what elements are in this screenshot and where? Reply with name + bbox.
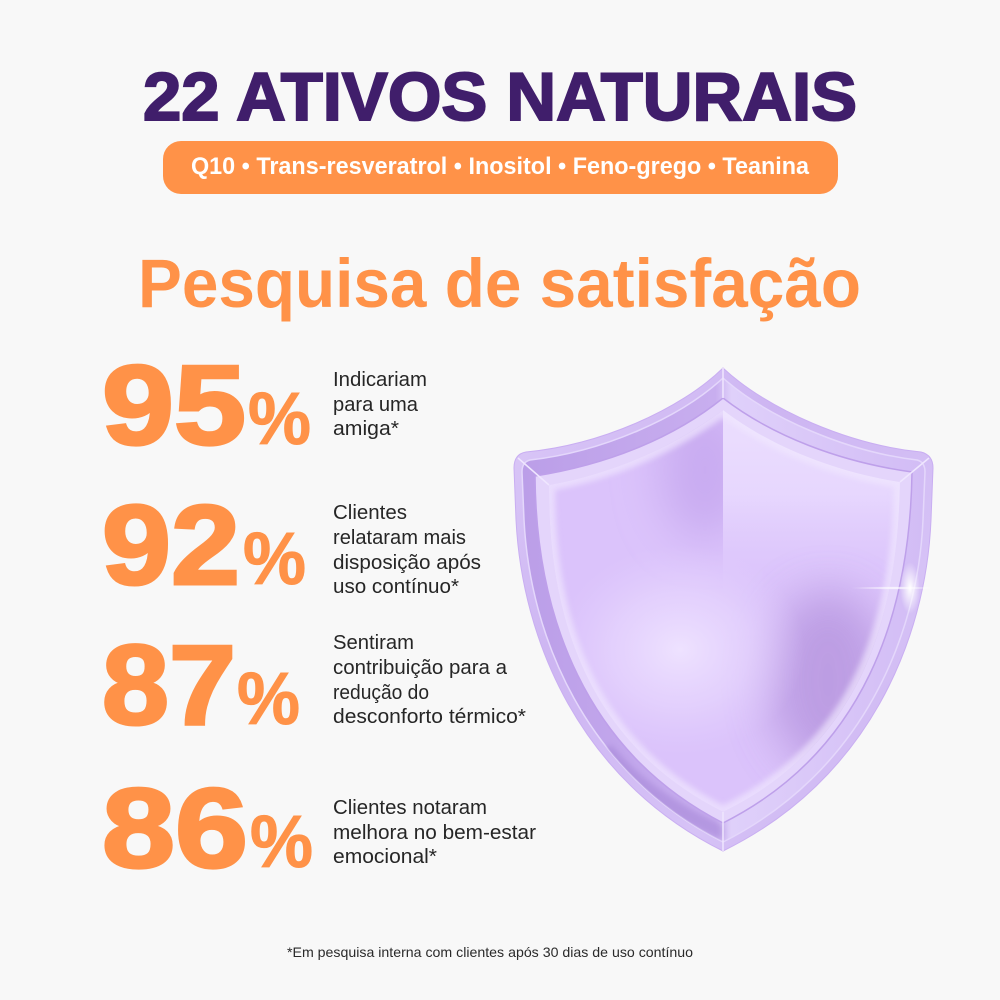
- shield outer rim: [514, 368, 933, 851]
- description: [333, 369, 427, 440]
- ingredient pill: [163, 141, 838, 194]
- number 95: 95: [102, 342, 246, 468]
- description: para uma: [333, 394, 419, 416]
- description: melhora no bem-estar: [333, 822, 536, 844]
- description: amiga*: [333, 418, 399, 440]
- description: contribuição para a: [333, 657, 508, 679]
- face inner edge glow: [549, 410, 900, 812]
- description: desconforto térmico*: [333, 706, 526, 728]
- description: Sentiram: [333, 632, 414, 654]
- percent sign: %: [250, 800, 313, 883]
- face crease shadow: [654, 418, 723, 542]
- footnote: *Em pesquisa interna com clientes após 30 dias de uso contínuo: [287, 944, 693, 960]
- sparkle glow: [900, 562, 920, 614]
- number 86: 86: [102, 765, 248, 891]
- shield middle ridge: [535, 398, 912, 823]
- center crease: [722, 368, 724, 851]
- description: redução do: [333, 682, 429, 704]
- rim lower-left dark glint: [600, 745, 723, 840]
- stat: 87%: [102, 622, 526, 748]
- icon: purple glass shield: [514, 368, 940, 851]
- pill text: Q10 • Trans-resveratrol • Inositol • Feno-grego • Teanina: [191, 153, 810, 180]
- shield rim channel: [522, 378, 925, 842]
- percent sign: %: [237, 657, 300, 740]
- description: [333, 502, 481, 598]
- pill background: [163, 141, 838, 194]
- glint shape: [600, 745, 723, 840]
- face dark lower-right: [768, 590, 888, 770]
- description: Indicariam: [333, 369, 427, 391]
- number 87: 87: [102, 622, 236, 748]
- corner seams: [518, 458, 929, 485]
- crease shadow blur: [654, 418, 723, 542]
- description: Clientes: [333, 502, 407, 524]
- number 92: 92: [102, 482, 240, 608]
- description: uso contínuo*: [333, 576, 459, 598]
- section heading: Pesquisa de satisfação: [138, 245, 861, 322]
- stat: 95%: [102, 342, 427, 468]
- sparkle: [850, 562, 940, 614]
- sparkle ray: [850, 586, 940, 590]
- percent sign: %: [243, 517, 306, 600]
- description: disposição após: [333, 552, 481, 574]
- title: 22 ATIVOS NATURAIS: [143, 59, 857, 135]
- description: emocional*: [333, 846, 437, 868]
- percent sign: %: [248, 377, 311, 460]
- shield face shading: [549, 400, 903, 815]
- description: [333, 632, 526, 728]
- shield face base: [549, 410, 900, 812]
- description: Clientes notaram: [333, 797, 487, 819]
- description: relataram mais: [333, 527, 466, 549]
- face highlight glow: [596, 578, 787, 720]
- description: [333, 797, 536, 868]
- face top right light: [723, 410, 897, 538]
- stat: 92%: [102, 482, 481, 608]
- stat: 86%: [102, 765, 536, 891]
